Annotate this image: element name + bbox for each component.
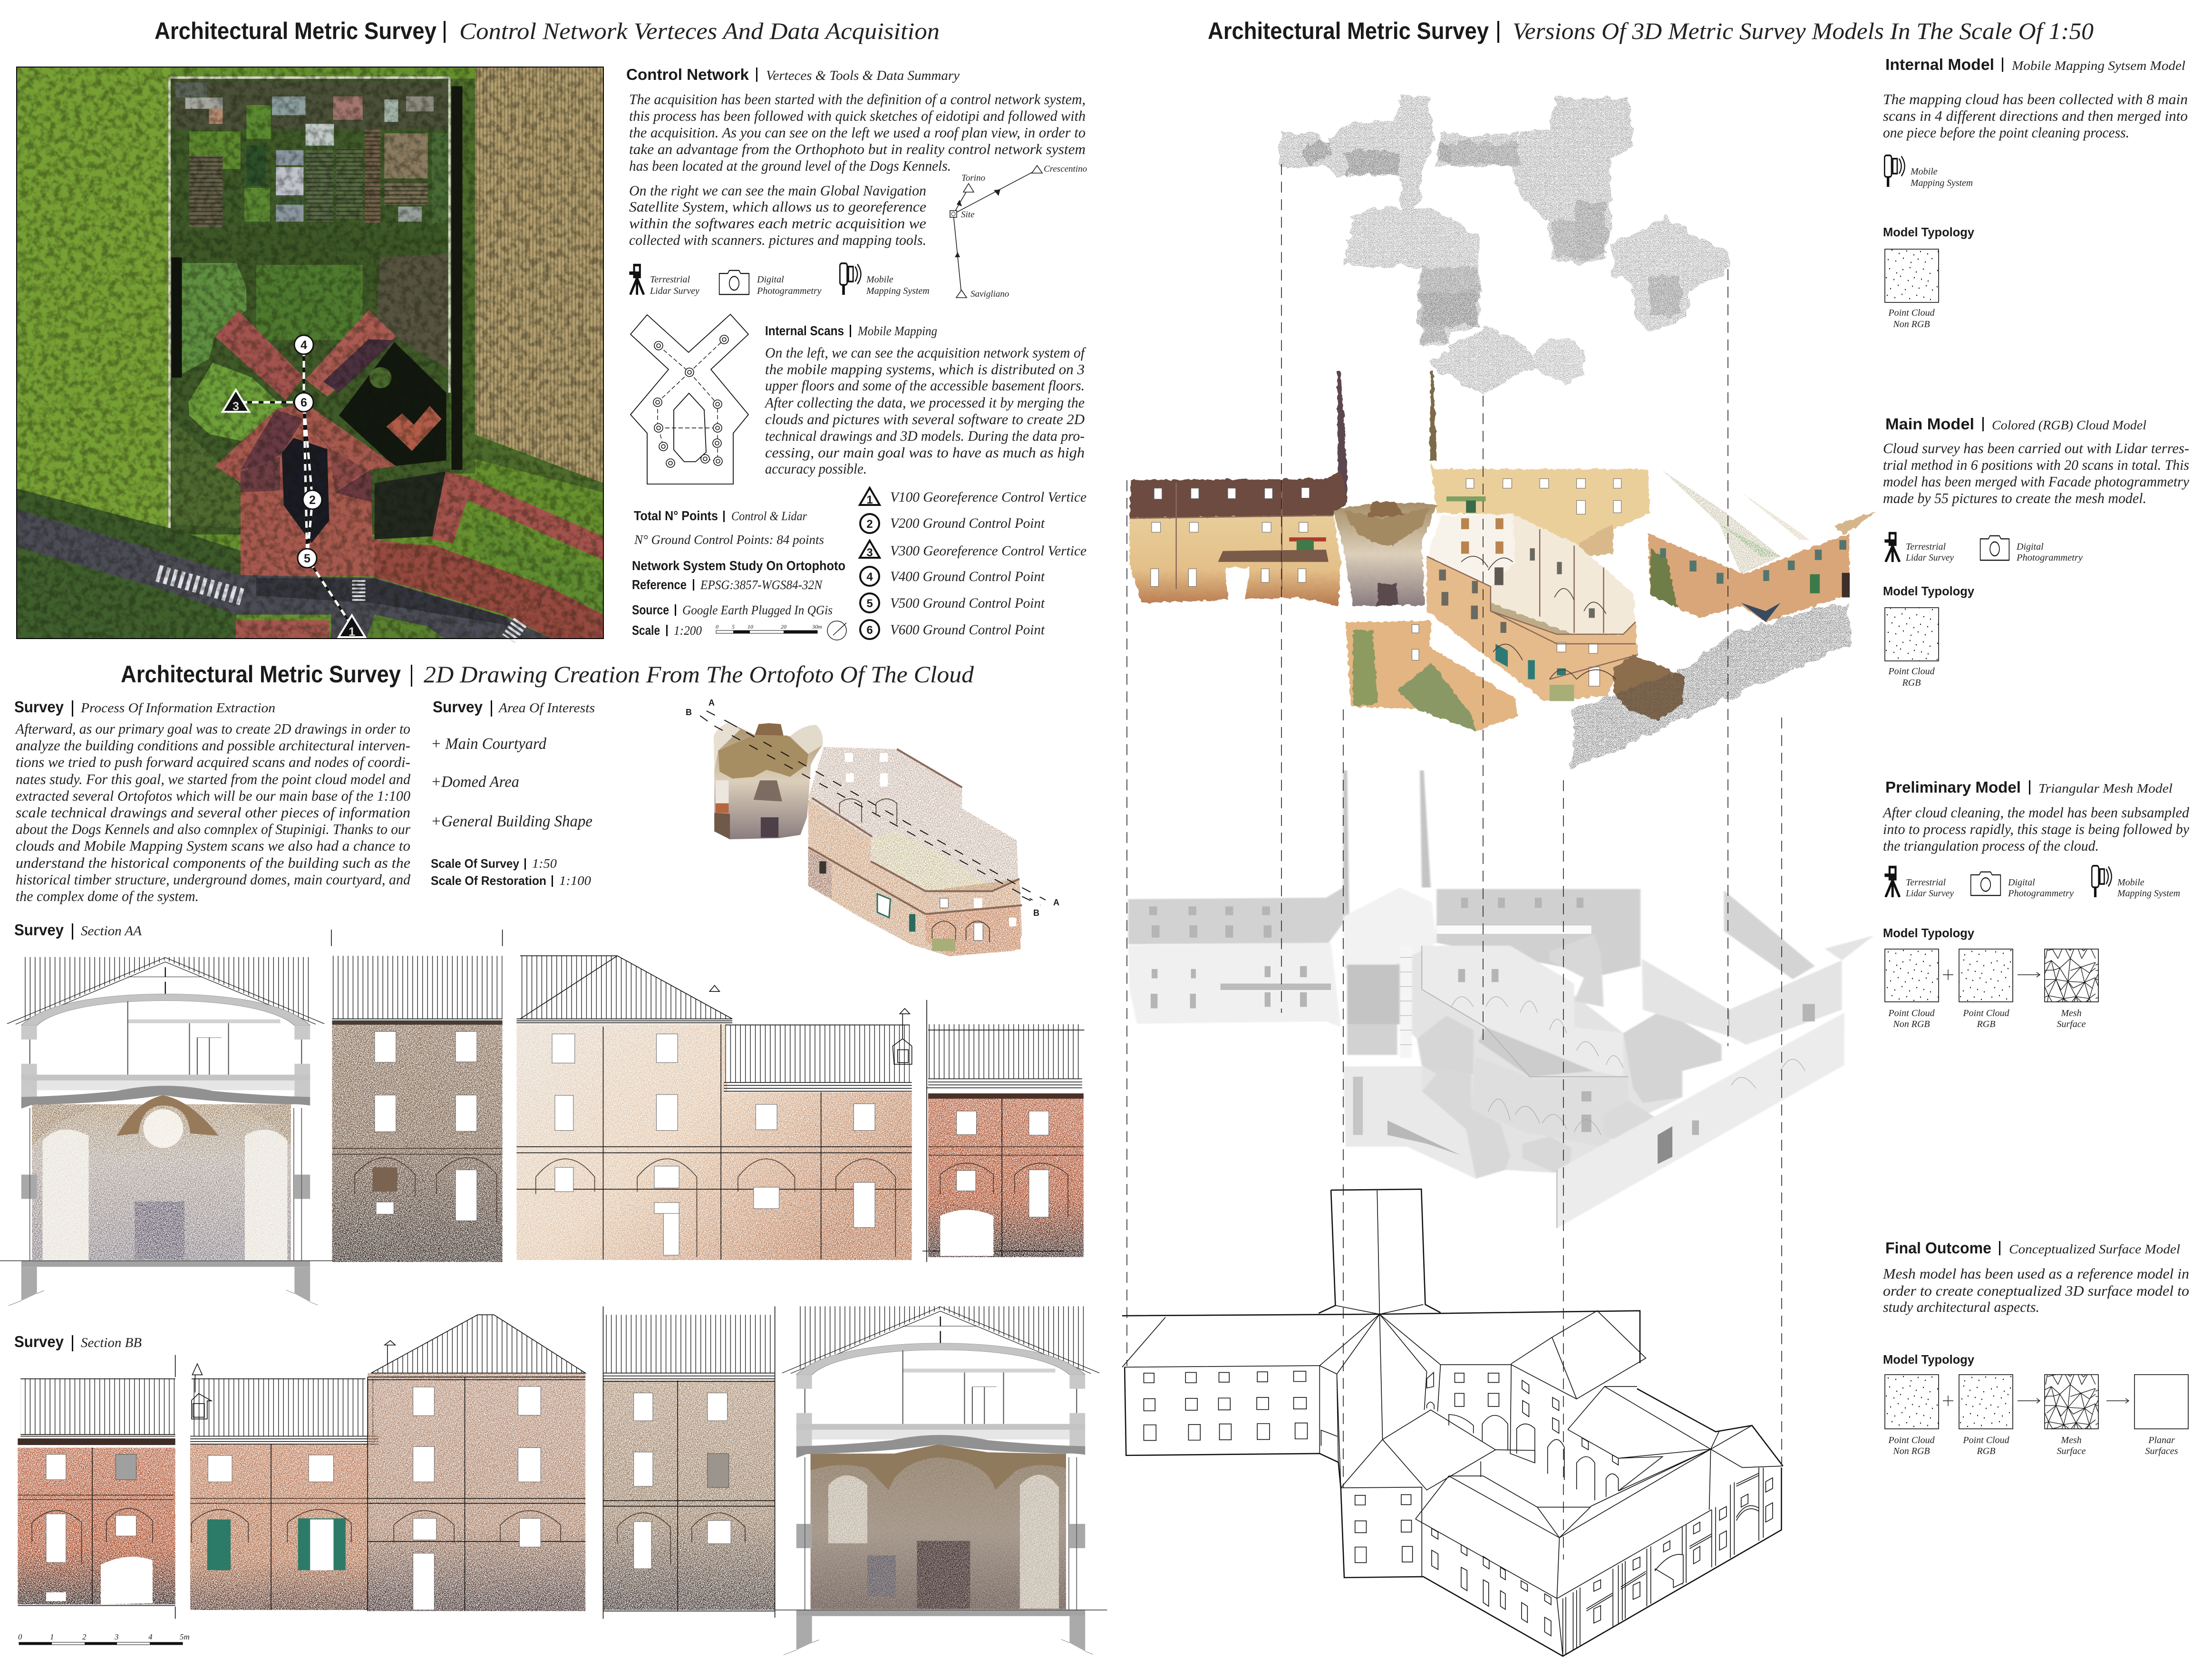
orthophoto site map [17,67,603,639]
icon: terrestrial lidar [1884,532,1900,562]
data summary: Total N° Points [634,508,718,523]
photo mottling [17,67,603,639]
data summary [632,508,845,638]
section markers: A [708,698,715,708]
text: internal scans: the mobile mapping systems, which is distributed on 3 [765,361,1085,378]
graphic scale bar 0-5 m: 0 [18,1632,22,1641]
legend V600 [860,620,1045,639]
text: internal scans: clouds and pictures with several software to create 2D [765,411,1085,427]
heading: section AA: Survey [14,921,64,939]
title: 2D drawing creation: 2D Drawing Creation From The Ortofoto Of The Cloud [424,661,974,688]
area of interests list: +General Building Shape [431,813,592,830]
drawing: section AA [0,930,1084,1306]
facade 1 [331,930,503,1262]
legend V300: V300 Georeference Control Vertice [890,543,1087,559]
icon label [2016,542,2083,563]
text: survey process body: the complex dome of the system. [16,888,199,904]
text: survey process body: Afterward, as our primary goal was to create 2D drawings in order to [15,720,410,737]
icon label [2008,877,2074,899]
text: survey process body: clouds and Mobile Mapping System scans we also had a chance to [16,837,410,854]
legend V400 [860,567,1045,586]
text: control network paragraph one: The acquisition has been started with the definition of a control network system, [629,91,1086,107]
GNSS network diagram: Savigliano [970,289,1009,299]
legend V300: 3 [866,546,873,559]
graphic scale bar 0-5 m: 1 [50,1632,54,1641]
GNSS network diagram [950,164,1087,299]
icon label: Mapping System [1910,178,1973,188]
body text: Cloud survey has been carried out with Lidar terres- [1883,440,2189,456]
graphic scale bar 0-5 m: 4 [148,1632,153,1641]
body text: made by 55 pictures to create the mesh model. [1883,490,2146,506]
text: control network paragraph one: this process has been followed with quick sketches of eidotipi and followed with [629,107,1086,124]
GNSS network diagram: Site [961,210,975,220]
model typology: Non RGB [1892,319,1930,330]
icon label: Terrestrial [1906,877,1946,888]
text: internal scans: technical drawings and 3D models. During the data pro- [765,427,1085,444]
data summary: Source [632,602,669,617]
tools row: Digital [757,274,784,285]
icon label [1910,166,1973,188]
data summary: 1:200 [674,623,702,638]
icon label: Lidar Survey [1905,553,1954,563]
heading: Conceptualized Surface Model [2009,1242,2180,1256]
legend V500: V500 Ground Control Point [890,595,1045,611]
cross section with interior [0,957,333,1306]
text: survey process body: scale technical drawings and several other pieces of information [16,804,410,821]
facade b [190,1364,378,1610]
heading [1885,778,2173,796]
area of interests list: 1:50 [532,856,557,871]
heading: survey process: Process Of Information Extraction [80,701,275,716]
model typology: Model Typology [1883,584,1975,598]
model typology: Point Cloud [1962,1008,2010,1018]
drawing: section BB [18,1306,1107,1655]
heading: Internal Model [1885,56,1994,73]
text: control network paragraph one: the acquisition. As you can see on the left we used a roof plan view, in order to [629,124,1086,141]
3D model: conceptual surface linework [1122,1189,1783,1656]
network dashed lines [236,345,352,626]
data summary: EPSG:3857-WGS84-32N [700,578,823,592]
heading: section BB: Survey [14,1333,64,1350]
map scale bar and north arrow [716,621,846,640]
marker 5 [298,549,317,568]
model typology: Point Cloud [1962,1435,2010,1445]
text: survey process body [15,720,411,904]
title: 3D models [1208,18,2094,44]
model typology: Surface [2057,1446,2086,1456]
title: control network [155,18,940,44]
model typology: Model Typology [1883,926,1975,940]
3D cut view of the building with section lines [686,698,1059,956]
facade 2 [516,956,912,1260]
data summary: Reference [632,577,687,592]
model typology: RGB [1977,1446,1995,1456]
model typology [1883,926,2098,1029]
facade d [603,1306,775,1619]
text: internal scans: accuracy possible. [765,460,867,477]
icon label: Lidar Survey [1905,888,1954,899]
heading: survey process: Survey [14,698,64,716]
icon label: Digital [2008,877,2035,888]
text: control network paragraph two: collected with scanners. pictures and mapping tools. [629,232,926,248]
marker 5: 5 [304,552,310,565]
body text: one piece before the point cleaning process. [1883,124,2129,141]
legend V500: 5 [866,597,873,610]
data summary: Google Earth Plugged In QGis [682,603,833,617]
model typology: Model Typology [1883,225,1975,239]
body text: order to create coneptualized 3D surface model to [1883,1282,2189,1299]
3D model: coloured RGB cloud [1129,371,1876,769]
model typology: Point Cloud [1888,308,1935,318]
title: 2D drawing creation: Architectural Metric Survey [121,661,401,688]
marker 2 [303,490,322,509]
icon label: Terrestrial [1906,542,1946,552]
body text [1883,91,2188,141]
courtyard point cloud [808,747,1018,891]
map scale bar and north arrow: 0 [716,623,718,630]
legend V100: 1 [866,494,873,506]
panel: internal model [1883,56,2188,330]
facade 3 [922,1000,1084,1262]
text: control network paragraph one: take an advantage from the Orthophoto but in reality control network system [629,141,1086,157]
heading: Triangular Mesh Model [2038,781,2173,795]
marker 6 [294,393,313,412]
heading: Main Model [1885,415,1974,433]
text: survey process body: about the Dogs Kennels and also comnplex of Stupinigi. Thanks to our [16,821,411,837]
facade c [368,1315,585,1611]
heading [1885,56,2185,73]
model typology: Mesh [2060,1008,2082,1018]
icon label: Photogrammetry [2016,553,2083,563]
model typology: Point Cloud [1888,666,1935,677]
courtyard front wall trims [1129,483,1638,679]
area of interests list: + Main Courtyard [431,735,547,753]
legend V600: 6 [866,624,873,637]
body text: into to process rapidly, this stage is being followed by [1883,821,2189,837]
model typology [1883,584,1975,688]
heading: Mobile Mapping Sytsem Model [2011,58,2185,73]
area of interests list: +Domed Area [431,773,519,791]
dome interior [714,722,823,839]
heading: Colored (RGB) Cloud Model [1992,418,2146,432]
icon: mobile mapping [2092,866,2112,897]
section markers: B [1033,908,1039,918]
data summary: N° Ground Control Points: 84 points [634,533,824,547]
title: control network: Architectural Metric Survey [155,18,437,44]
title: 3D models: Versions Of 3D Metric Survey Models In The Scale Of 1:50 [1513,18,2094,44]
text: internal scans: Mobile Mapping [857,324,937,338]
data summary: Network System Study On Ortophoto [632,558,845,573]
model typology [1883,1352,2188,1456]
icon: camera [1980,536,2009,560]
data summary: Scale [632,623,660,638]
model typology: Surface [2057,1019,2086,1029]
3D model: triangular mesh [1128,770,1874,1228]
icon label [1905,542,1954,563]
heading: survey process [14,698,275,717]
text: internal scans: upper floors and some of the accessible basement floors. [765,377,1085,394]
text: control network paragraph one [629,91,1086,174]
heading: control network [626,66,960,83]
frame [17,67,603,639]
body text: trial method in 6 positions with 20 scans in total. This [1883,456,2189,473]
body text: scans in 4 different directions and then merged into [1883,107,2188,124]
body text: the triangulation process of the cloud. [1883,837,2099,854]
text: survey process body: tions we tried to push forward acquired scans and nodes of coordi- [16,754,410,770]
heading [1885,415,2146,433]
body text: model has been merged with Facade photogrammetry [1883,473,2189,490]
icon: mobile mapping [840,263,861,295]
marker 6: 6 [301,396,307,409]
model typology [1883,225,1975,330]
stacked model projection lines [1127,164,1782,1560]
legend V500 [860,593,1045,612]
heading [1885,1239,2180,1257]
heading: Final Outcome [1885,1239,1991,1257]
heading: section BB: Section BB [81,1336,142,1350]
3D model: internal grey point cloud [1279,96,1728,395]
panel: final outcome [1882,1239,2189,1456]
area of interests list: Scale Of Restoration [431,873,546,888]
text: control network paragraph two: within the softwares each metric acquisition we [629,215,926,232]
text: internal scans: On the left, we can see the acquisition network system of [765,344,1087,361]
model typology: Model Typology [1883,1352,1975,1367]
tools row [629,263,930,296]
icon label: Photogrammetry [2008,888,2074,899]
body text: The mapping cloud has been collected with 8 main [1883,91,2188,107]
graphic scale bar 0-5 m: 3 [114,1632,119,1641]
title: 3D models: Architectural Metric Survey [1208,18,1489,44]
legend V400: 4 [866,571,873,583]
icon label: Digital [2016,542,2044,552]
title: control network: Control Network Verteces And Data Acquisition [459,18,940,44]
text: internal scans: cessing, our main goal was to have as much as high [765,444,1085,461]
model typology: Point Cloud [1888,1008,1935,1018]
heading: section BB [14,1333,142,1351]
marker 3: 3 [233,400,239,413]
heading: Preliminary Model [1885,778,2021,796]
text: internal scans: Internal Scans [765,323,844,338]
heading: control network: Control Network [626,66,749,83]
icon: terrestrial lidar [629,264,644,295]
model typology: Surfaces [2145,1446,2178,1456]
legend V400: V400 Ground Control Point [890,569,1045,584]
tools row: Lidar Survey [650,286,699,296]
area of interests list: Area Of Interests [498,701,595,716]
body text: study architectural aspects. [1883,1299,2039,1315]
body text: After cloud cleaning, the model has been subsampled [1882,804,2189,821]
legend V200: 2 [866,518,873,531]
heading: section AA: Section AA [81,924,142,939]
courtyard details [700,711,1046,951]
tools row: Terrestrial [650,274,690,285]
icon: terrestrial lidar [1884,866,1900,897]
tools row: Mapping System [866,286,930,296]
icon label [2117,877,2180,899]
graphic scale bar 0-5 m: 5m [180,1632,190,1641]
legend V100: V100 Georeference Control Vertice [890,489,1087,505]
body text [1883,440,2189,506]
graphic scale bar 0-5 m: 2 [82,1632,87,1641]
icon label: Mapping System [2117,888,2180,899]
marker 2: 2 [309,494,316,507]
model typology: Planar [2148,1435,2175,1445]
text: survey process body: historical timber structure, underground domes, main courtyard, and [16,871,410,888]
icon: mobile mapping [1884,155,1905,187]
marker 1 [339,615,365,639]
data summary: Control & Lidar [731,509,807,523]
GNSS network diagram: Crescentino [1044,164,1087,174]
plan of internal scan network [631,314,748,484]
marker 1: 1 [349,625,355,639]
text: control network paragraph one: has been located at the ground level of the Dogs Kennels. [629,157,951,174]
area of interests list: Survey [433,698,483,716]
text: survey process body: nates study. For this goal, we started from the point cloud model and [16,771,410,787]
legend of control points [860,488,1087,639]
model typology: Non RGB [1892,1019,1930,1029]
icon: camera [719,271,749,294]
area of interests list: Scale Of Survey [431,856,520,871]
heading: control network: Verteces & Tools & Data Summary [766,68,960,83]
panel: main model [1883,415,2189,688]
text: survey process body: extracted several Ortofotos which will be our main base of the 1:100 [16,787,410,804]
model typology: Point Cloud [1888,1435,1935,1445]
legend V200: V200 Ground Control Point [890,515,1045,531]
GNSS network diagram: Torino [961,173,985,183]
cross section with interior [775,1306,1107,1655]
area of interests list [431,698,595,888]
legend V600: V600 Ground Control Point [890,622,1045,638]
map scale bar and north arrow: 5 [732,623,735,630]
body text [1882,804,2189,854]
text: control network paragraph two: Satellite System, which allows us to georeference [629,198,926,215]
icon label [1905,877,1954,899]
body text [1882,1265,2189,1315]
title: 2D drawing creation [121,661,974,688]
text: internal scans [764,323,1087,477]
heading: section AA [14,921,142,940]
text: survey process body: understand the historical components of the building such as the [16,854,410,871]
icon label: Mobile [1910,166,1938,177]
legend V200 [860,514,1045,533]
text: control network paragraph two: On the right we can see the main Global Navigation [629,182,926,199]
text: control network paragraph two [629,182,926,248]
section markers: A [1053,898,1059,907]
text: survey process body: analyze the building conditions and possible architectural interven- [16,737,410,754]
tools row: Photogrammetry [757,286,822,296]
model typology: RGB [1977,1019,1995,1029]
model typology: Mesh [2060,1435,2082,1445]
section markers: B [686,708,692,717]
aerial image [17,67,603,639]
icon label: Mobile [2117,877,2144,888]
map scale bar and north arrow: 10 [747,623,753,630]
section markers [686,698,1059,918]
graphic scale bar 0-5 m [18,1632,190,1645]
map scale bar and north arrow: 30m [812,623,822,630]
area of interests list: 1:100 [559,873,592,888]
model typology: Non RGB [1892,1446,1930,1456]
marker 4: 4 [301,339,307,352]
panel: preliminary model [1882,778,2189,1029]
map scale bar and north arrow: 20 [781,623,786,630]
marker 4 [294,335,313,354]
model typology: RGB [1902,678,1921,688]
body text: Mesh model has been used as a reference model in [1882,1265,2189,1282]
marker 3 [223,390,249,413]
text: internal scans: After collecting the data, we processed it by merging the [764,394,1085,411]
icon: camera [1971,872,2000,895]
tools row: Mobile [866,274,893,285]
facade a [18,1355,175,1619]
